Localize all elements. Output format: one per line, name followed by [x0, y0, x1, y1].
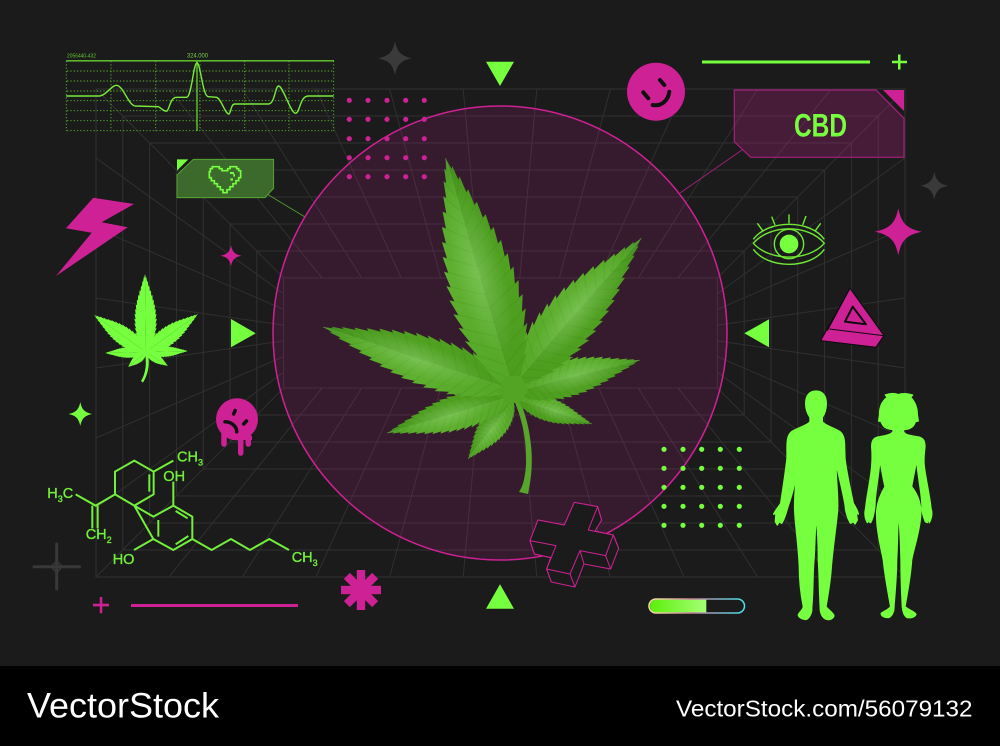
leaflet: lower left — [382, 378, 518, 451]
pink sparkle small — [220, 245, 242, 266]
CBD molecule diagram — [47, 450, 318, 568]
leaflet: small lower right — [513, 387, 596, 436]
leaflet: upper right — [492, 220, 662, 403]
icon: asterisk — [341, 570, 381, 610]
icon: pixel heart — [209, 167, 241, 193]
triangle pointing up — [486, 584, 514, 609]
ECG centre label: 324.000 — [187, 54, 209, 60]
label: CH3 top: 3 — [198, 458, 203, 468]
watermark URL: VectorStock.com/56079132 — [676, 696, 972, 722]
CBD label: CBD — [794, 108, 847, 144]
label: CH3 bottom: CH — [292, 550, 313, 566]
leaflet: top — [411, 148, 548, 400]
icon: lightning bolt — [56, 198, 134, 276]
molecule bonds — [76, 461, 289, 550]
leaflet: small lower left — [457, 391, 524, 468]
pink sparkle large — [875, 208, 922, 255]
tag corner — [177, 159, 188, 171]
gray sparkle right — [920, 172, 948, 200]
tag body — [177, 159, 274, 198]
icon: smiley face — [627, 63, 685, 121]
male silhouette — [774, 391, 858, 620]
triangle pointing left — [744, 319, 769, 347]
triangle pointing right — [231, 319, 256, 347]
progress outline — [649, 599, 744, 613]
pink dot matrix — [347, 98, 427, 179]
progress fill — [650, 600, 706, 612]
label: CH2: 2 — [107, 535, 112, 545]
icon: flat cannabis leaf — [88, 274, 204, 382]
label: CH3 bottom: 3 — [313, 558, 318, 568]
ECG left label: 2056440-432 — [67, 54, 96, 60]
connector: heart tag to circle — [267, 194, 305, 217]
icon: heart shine — [230, 172, 235, 181]
heart tag — [177, 159, 274, 198]
progress bar — [649, 599, 744, 613]
central circle — [273, 106, 727, 560]
ECG waveform — [66, 63, 334, 114]
tag body — [734, 90, 904, 157]
label: OH: OH — [163, 469, 185, 485]
label: CH2: CH — [86, 527, 107, 543]
icon: 3D medical cross — [530, 502, 619, 587]
leaf centre junction — [498, 376, 528, 403]
label: H3C: C — [63, 486, 73, 502]
triangle pointing down — [486, 62, 514, 86]
leaflet: left — [315, 303, 521, 414]
gray cross star — [34, 544, 80, 589]
ECG grid — [66, 61, 334, 131]
female silhouette — [865, 394, 932, 618]
leaflet: lower right — [508, 341, 645, 411]
CBD tag — [734, 90, 904, 157]
perspective grid room — [96, 89, 905, 577]
label: H3C: 3 — [58, 494, 63, 504]
icon: 3D triangle — [821, 288, 884, 347]
watermark bar — [0, 666, 1000, 746]
ECG top rule and marker — [66, 61, 334, 131]
label: CH3 top: CH — [177, 450, 198, 466]
label: HO: HO — [113, 552, 134, 568]
connector: CBD tag to circle — [680, 150, 742, 193]
green dot matrix — [661, 447, 742, 528]
ECG chart panel — [66, 54, 334, 131]
tag corner — [883, 90, 904, 111]
gray sparkle top — [378, 41, 412, 75]
pink rule with plus — [93, 597, 298, 613]
green sparkle — [68, 402, 92, 426]
main cannabis leaf — [315, 148, 662, 494]
label: H3C: H — [47, 486, 58, 502]
watermark logo: VectorStock — [27, 686, 219, 726]
green rule with plus — [702, 54, 907, 70]
icon: eye — [753, 214, 824, 264]
leaf stem — [513, 396, 532, 494]
human silhouettes — [774, 391, 932, 620]
icon: melting sad face — [216, 398, 258, 453]
